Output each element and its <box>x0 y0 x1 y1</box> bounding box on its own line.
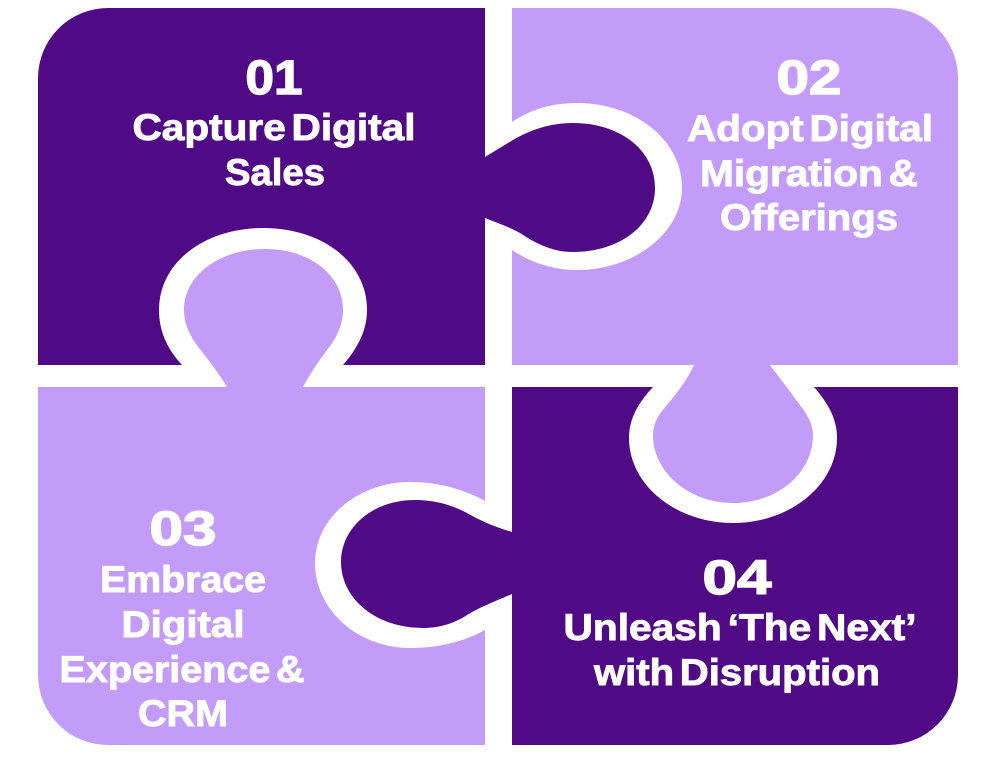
text block: step 02: Offerings <box>720 197 898 238</box>
text block: step 03: Digital <box>122 604 244 645</box>
text block: step 03: 03 <box>150 503 216 556</box>
text block: step 02: 02 <box>776 52 842 105</box>
text block: step 04: 04 <box>702 552 772 605</box>
panel: piece 02 <box>512 8 958 365</box>
panel: piece 03 <box>38 387 485 745</box>
text block: step 04: with Disruption <box>593 652 880 693</box>
text block: step 02: Migration & <box>700 153 918 194</box>
text block: step 03: Experience & <box>60 649 304 690</box>
text block: step 01: 01 <box>246 52 302 105</box>
connector: piece 01 tab into piece 02 <box>485 103 682 270</box>
text block: step 01: Capture Digital <box>132 107 416 148</box>
connector: piece 02 tab into piece 04 <box>629 365 837 523</box>
text block: step 04 <box>564 552 916 693</box>
text block: step 01: Sales <box>225 152 325 193</box>
connector: piece 03 tab into piece 01 <box>159 228 367 387</box>
panel: piece 04 <box>512 387 958 745</box>
text block: step 03: CRM <box>138 693 228 734</box>
text block: step 03: Embrace <box>100 559 266 600</box>
text block: step 02 <box>687 52 933 238</box>
text block: step 01 <box>132 52 416 193</box>
text block: step 02: Adopt Digital <box>687 108 933 149</box>
connector: piece 04 tab into piece 03 <box>315 482 512 648</box>
text block: step 04: Unleash ‘The Next’ <box>564 607 916 648</box>
text block: step 03 <box>60 503 304 734</box>
panel: piece 01 <box>38 8 485 365</box>
